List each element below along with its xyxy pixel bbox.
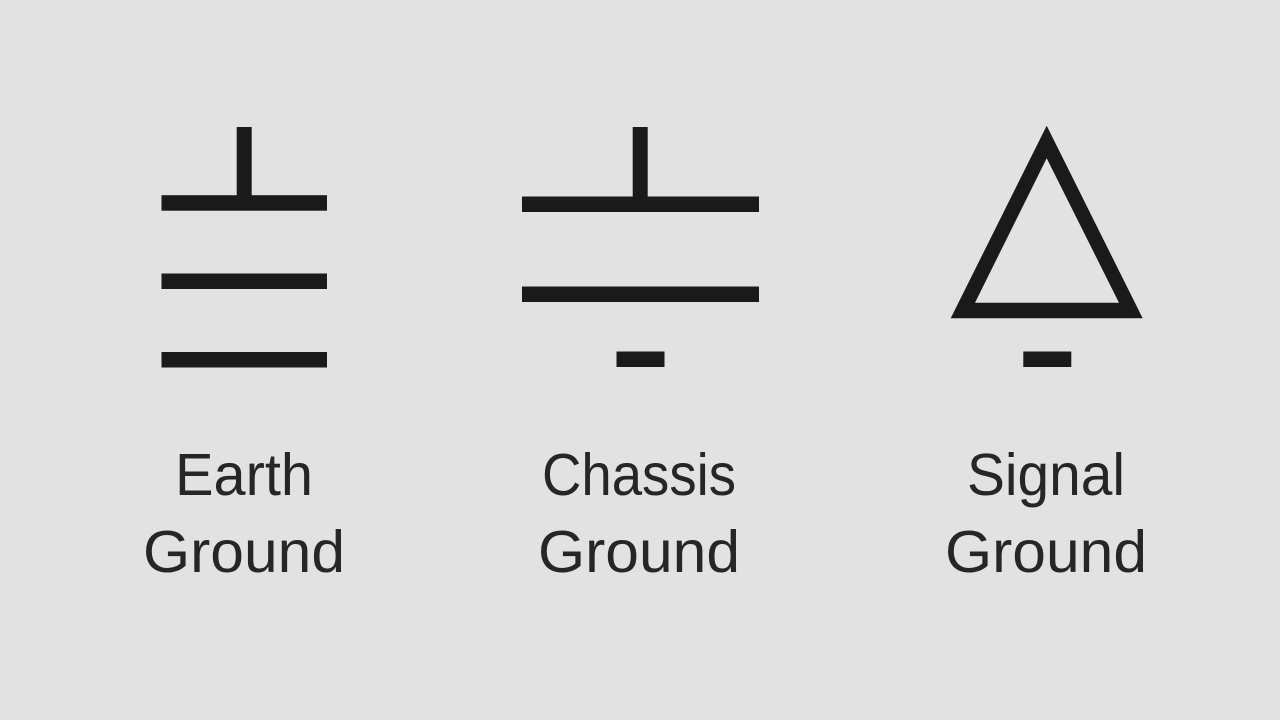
icon: signal ground symbol [951,126,1143,367]
icon: chassis ground symbol [522,127,759,367]
label: chassis ground: Ground [538,519,740,585]
label: earth ground [143,442,345,585]
label: earth ground: Ground [143,519,345,585]
label: signal ground: Ground [945,519,1147,585]
label: chassis ground [538,442,740,585]
label: signal ground: Signal [967,442,1125,508]
label: chassis ground: Chassis [542,442,736,508]
label: signal ground [945,442,1147,585]
icon: earth ground symbol [162,127,327,368]
label: earth ground: Earth [175,442,313,508]
